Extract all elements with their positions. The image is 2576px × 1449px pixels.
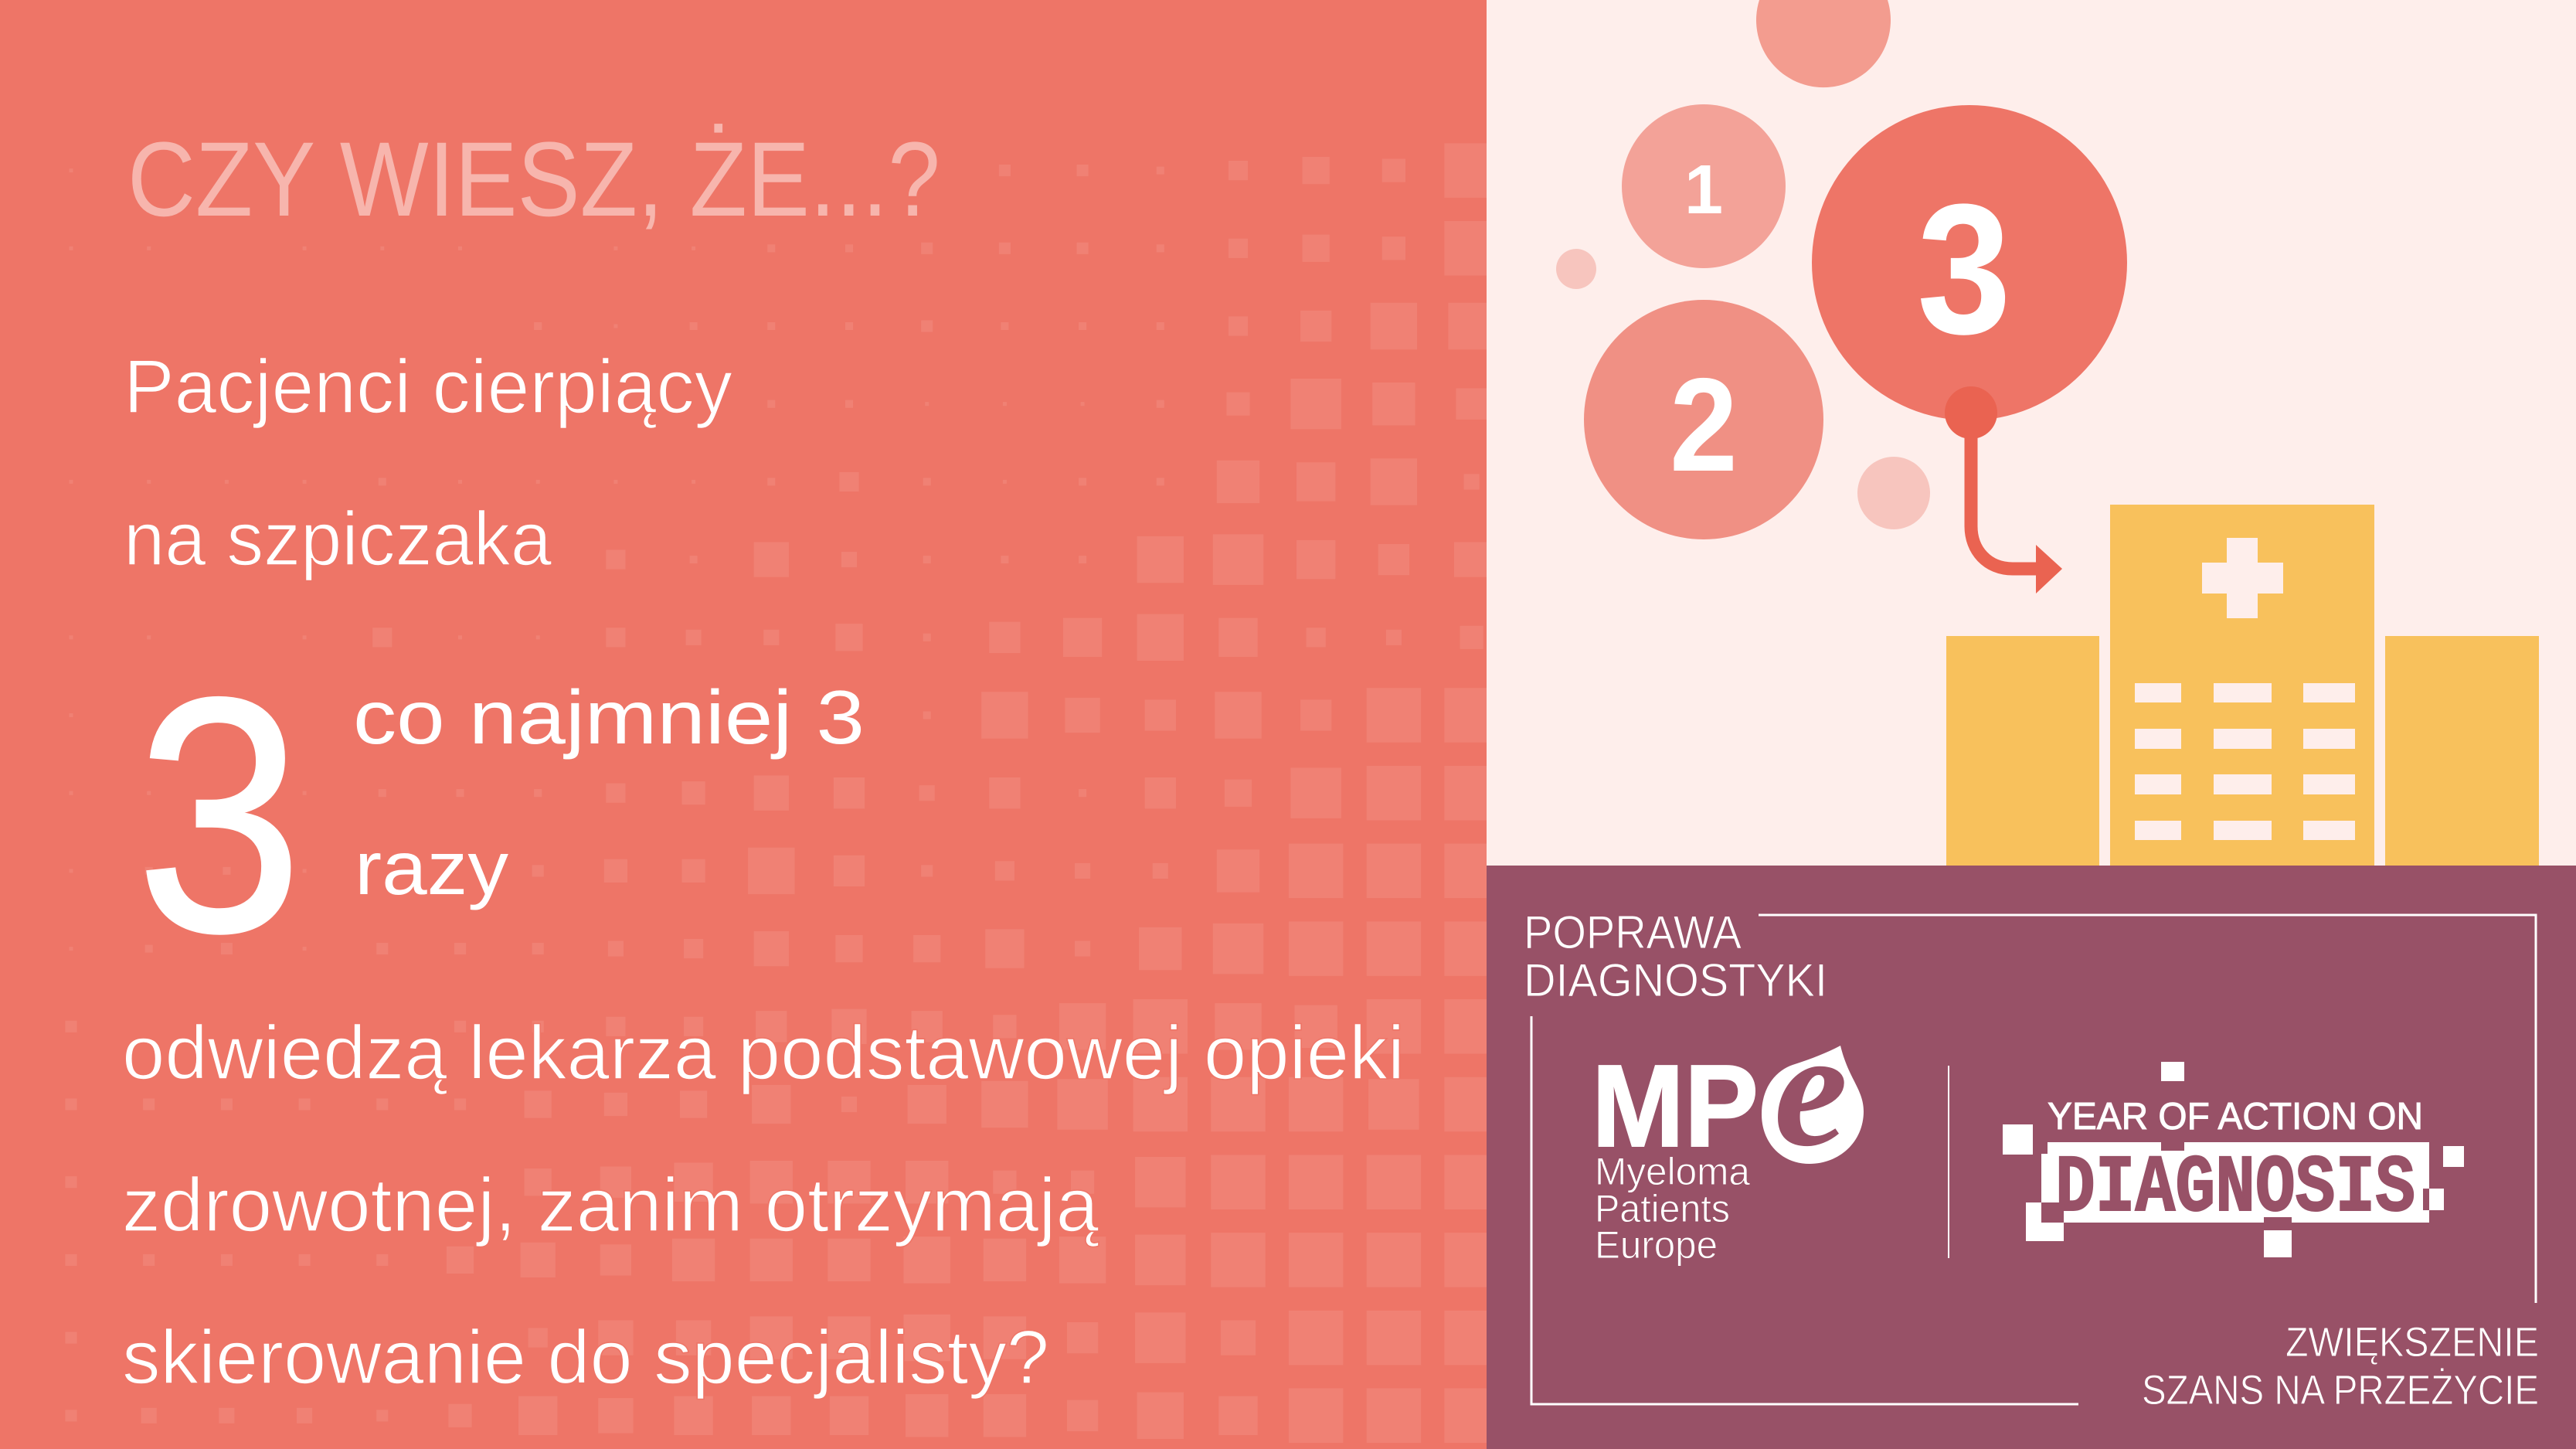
circle: visit 2	[1584, 300, 1823, 539]
arrow: to hospital	[1945, 386, 2062, 594]
circle: visit 1: 1	[1684, 151, 1723, 229]
text: at least 3: co najmniej 3	[353, 675, 865, 760]
frame lines	[1531, 915, 2536, 1404]
text: times: razy	[355, 825, 508, 910]
circle: top decorative	[1756, 0, 1891, 87]
text: body line 1: odwiedzą lekarza podstawowej opieki	[122, 1010, 1405, 1095]
logo: Myeloma Patients Europe	[1592, 996, 1864, 1267]
text: improving diagnosis	[1524, 906, 1827, 1006]
logo: Year of Action on Diagnosis: YEAR OF ACTION ON	[2048, 1096, 2423, 1138]
panel: illustration of visits and hospital	[1487, 0, 2576, 866]
circle: small left decorative	[1556, 249, 1596, 289]
circle: visit 3: 3	[1917, 165, 2011, 372]
text: improving diagnosis: DIAGNOSTYKI	[1524, 954, 1827, 1006]
logo: Year of Action on Diagnosis: DIAGNOSIS	[2055, 1143, 2415, 1235]
title: CZY WIESZ, ŻE...?	[127, 121, 940, 239]
text: patients line 1: Pacjenci cierpiący	[124, 344, 732, 429]
panel: plum footer with logos	[1487, 866, 2576, 1449]
text: improving survival chances: ZWIĘKSZENIE	[2285, 1319, 2539, 1366]
icon: hospital	[1946, 505, 2539, 866]
text: patients line 2: na szpiczaka	[124, 496, 552, 581]
circle: visit 3	[1812, 105, 2127, 420]
text: body line 2: zdrowotnej, zanim otrzymają	[122, 1162, 1099, 1247]
logo divider	[1948, 1066, 1949, 1258]
big number 3: 3	[136, 628, 303, 1002]
logo: Myeloma Patients Europe: Patients	[1595, 1187, 1730, 1230]
logo: Myeloma Patients Europe: e	[1774, 996, 1847, 1181]
circle: visit 1	[1622, 104, 1786, 268]
logo: Year of Action on Diagnosis	[2003, 1062, 2464, 1257]
text: improving diagnosis: POPRAWA	[1524, 906, 1742, 958]
circle: visit 2: 2	[1670, 351, 1738, 499]
text: body line 3: skierowanie do specjalisty?	[122, 1315, 1049, 1400]
logo: Myeloma Patients Europe: Europe	[1595, 1223, 1718, 1267]
logo: Myeloma Patients Europe: MP	[1592, 1040, 1759, 1171]
logo: Myeloma Patients Europe: Myeloma	[1595, 1150, 1750, 1193]
circle: small lower decorative	[1857, 457, 1930, 529]
text: improving survival chances	[2142, 1319, 2539, 1413]
panel: left coral fact panel	[65, 124, 1487, 1443]
